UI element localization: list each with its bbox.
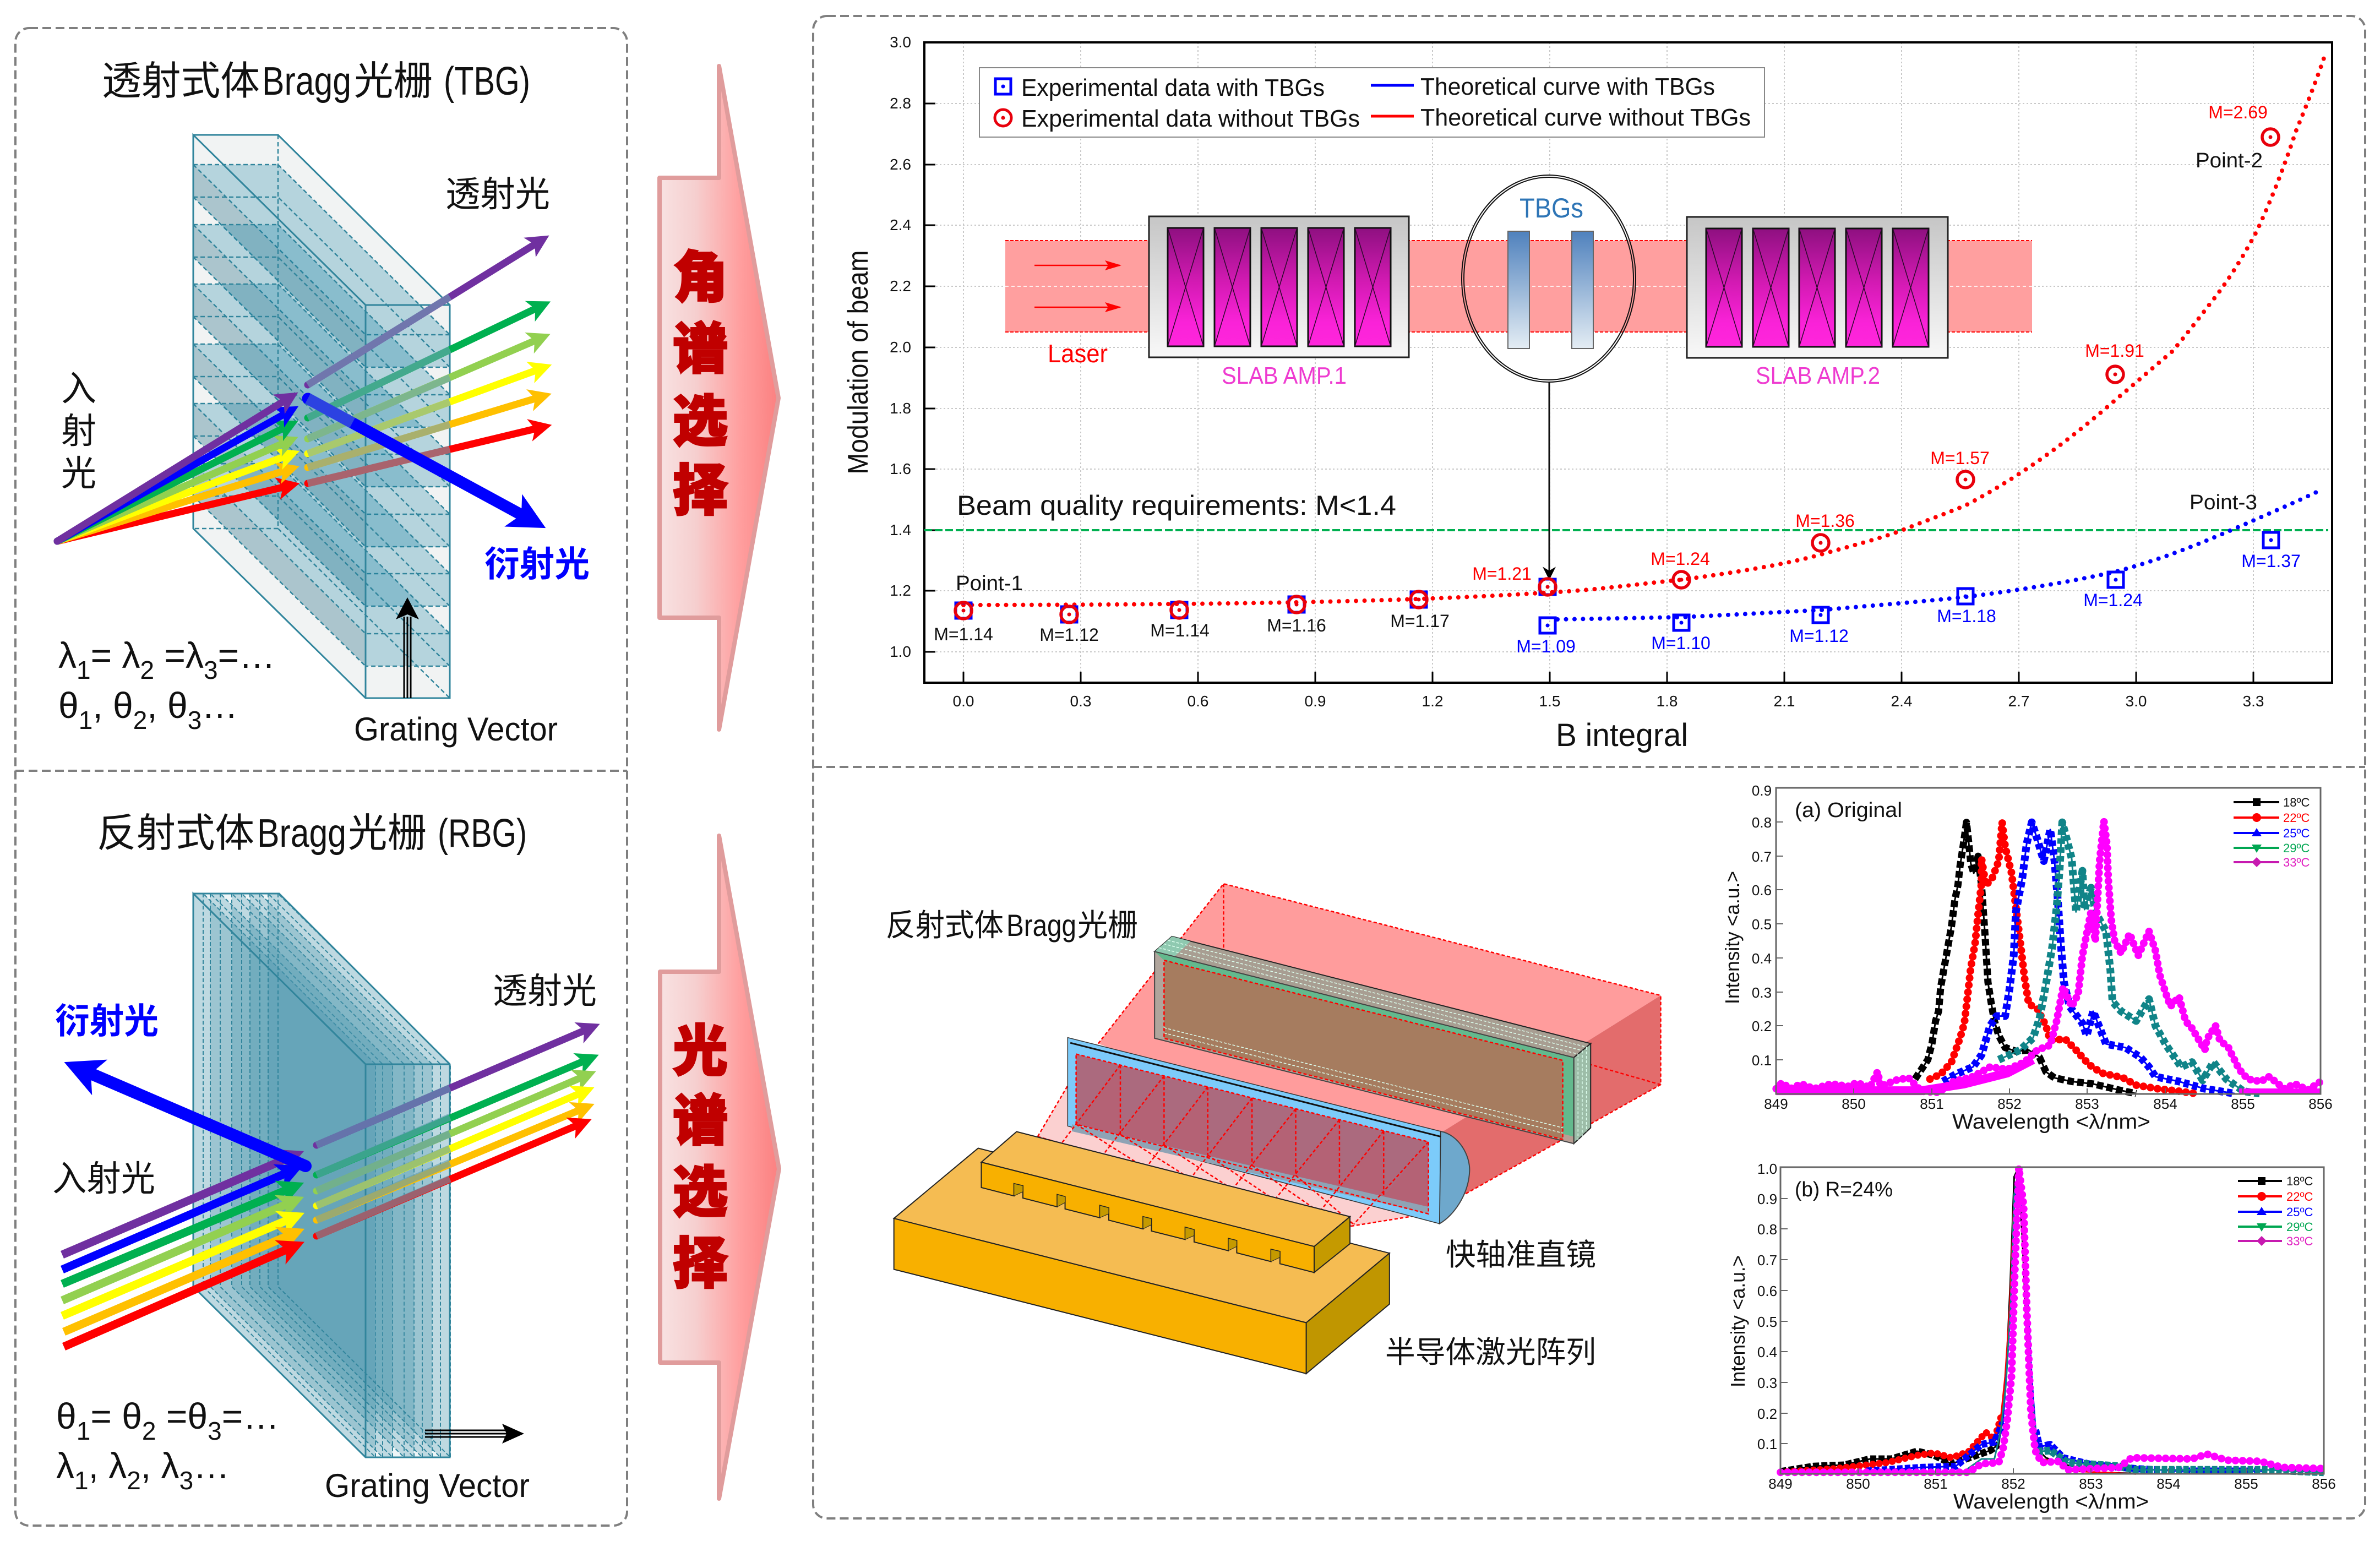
heading: RBG title: 反射式体: [97, 812, 254, 856]
x tick labels: [953, 693, 2264, 710]
y tick labels: 1.4: [890, 521, 911, 538]
series 18C: [1780, 1168, 2136, 1473]
label: 衍射光: 衍射光: [484, 544, 590, 584]
y tick labels: 2.6: [890, 156, 911, 173]
beam: laser band: [1005, 241, 2032, 332]
heading: TBG title: [102, 59, 530, 104]
y tick labels: 1.2: [890, 582, 911, 599]
panel: right dashed frame: [813, 16, 2365, 1518]
legend b: 33ºC: [2286, 1234, 2313, 1248]
threshold line: [924, 529, 2328, 531]
legend: Theoretical curve without TBGs: [1420, 104, 1751, 131]
heading: RBG title: Bragg: [257, 812, 346, 856]
curve: theory without TBGs: [963, 55, 2325, 605]
y tick labels: 3.0: [890, 34, 911, 51]
arrows: incident rays TBG: [57, 401, 284, 541]
text: angles: 2: [133, 706, 147, 734]
x ticks: 849: [1768, 1475, 1793, 1492]
arrows: incident rays RBG: [62, 1159, 286, 1347]
series 33C: [1780, 1168, 2324, 1472]
data labels red: M=1.91: [2085, 341, 2144, 361]
x tick labels: 1.5: [1539, 693, 1560, 710]
x ticks: 854: [2156, 1475, 2181, 1492]
y axis label: Intensity <a.u.>: [1727, 1255, 1749, 1387]
arrow: spectral selection: [660, 836, 779, 1499]
heading: RBG title: 光栅: [348, 812, 427, 856]
label: 衍射光 RBG: 衍射光: [55, 1001, 159, 1041]
x ticks: 855: [2231, 1096, 2255, 1112]
y ticks: 0.9: [1757, 1191, 1777, 1207]
data labels red: M=1.57: [1930, 448, 1990, 468]
arrow: angular selection: 选: [673, 391, 728, 453]
y ticks: 0.5: [1757, 1314, 1777, 1330]
x tick labels: 1.2: [1422, 693, 1443, 710]
diagram: reflection grating box: [193, 894, 450, 1457]
x ticks: [1764, 1096, 2333, 1112]
arrow: angular selection: [660, 66, 778, 729]
label: Grating Vector RBG: Grating Vector: [325, 1467, 530, 1504]
amplifier 1: [1149, 216, 1409, 357]
data labels black: M=1.17: [1390, 611, 1450, 631]
legend: Theoretical curve with TBGs: [1420, 73, 1715, 100]
legend a: 25ºC: [2283, 826, 2310, 840]
heading: TBG title: (TBG): [444, 59, 530, 104]
arrow: grating vector TBG: [396, 597, 419, 698]
series 29C: [1964, 1168, 2324, 1472]
text: wavelengths: , λ: [141, 1445, 179, 1486]
data labels blue: M=1.10: [1651, 633, 1711, 653]
y ticks: 0.4: [1752, 950, 1772, 967]
x ticks: 854: [2153, 1096, 2177, 1112]
label: 透射光: 透射光: [445, 175, 550, 214]
TBG elements and lens: [1462, 175, 1636, 382]
y ticks: 0.2: [1752, 1018, 1772, 1034]
label: 反射式体Bragg光栅: [886, 908, 1138, 943]
label: Point-3: Point-3: [2190, 491, 2257, 514]
label: 半导体激光阵列: 半导体激光阵列: [1385, 1335, 1596, 1369]
legend b: 22ºC: [2286, 1190, 2313, 1204]
y axis label: Intensity <a.u.>: [1721, 871, 1744, 1004]
text: wavelength equal: =…: [218, 635, 275, 676]
chart: (a) original spectra: [1721, 782, 2333, 1134]
label: SLAB AMP.1: SLAB AMP.1: [1222, 362, 1347, 389]
y ticks: 0.6: [1757, 1283, 1777, 1299]
emitter fan: [1038, 1086, 1428, 1226]
x tick labels: 0.0: [953, 693, 974, 710]
text: wavelength equal: = λ: [91, 635, 140, 676]
arrow: diffracted ray RBG: [91, 1074, 306, 1166]
label: 入射光 vertical: 光: [61, 454, 96, 493]
text: angles: , θ: [147, 685, 188, 726]
arrow: spectral selection: 择: [673, 1233, 728, 1295]
x ticks: 849: [1764, 1096, 1788, 1112]
ellipse: TBG lens background: [1462, 175, 1636, 382]
arrow: spectral selection: 选: [673, 1162, 728, 1223]
x ticks: [1768, 1475, 2336, 1492]
heading: TBG title: Bragg: [262, 59, 351, 104]
data labels black: M=1.16: [1267, 616, 1326, 635]
chart: beam modulation vs B integral: [842, 34, 2332, 753]
series 29C: [1998, 823, 2261, 1093]
text: angles: , θ: [92, 685, 133, 726]
text: wavelength equal: =λ: [154, 635, 204, 676]
x tick labels: 0.6: [1188, 693, 1208, 710]
x tick labels: 2.7: [2008, 693, 2029, 710]
arrow: spectral selection: 谱: [673, 1091, 728, 1152]
legend b: 18ºC: [2286, 1174, 2313, 1188]
data labels red: M=1.21: [1472, 564, 1532, 584]
label: 入射光 vertical: 入: [61, 369, 96, 409]
data labels red: [1472, 102, 2268, 584]
data labels blue: [1516, 551, 2301, 656]
text: wavelengths: λ: [56, 1445, 74, 1486]
text: angle equal: =θ: [156, 1396, 208, 1436]
data labels red: M=2.69: [2208, 102, 2268, 122]
y tick labels: 2.0: [890, 339, 911, 356]
y tick labels: 2.4: [890, 216, 911, 233]
text: angles: 3: [188, 706, 201, 734]
legend: Experimental data without TBGs: [1021, 105, 1360, 132]
arrow: angular selection: 角: [673, 247, 728, 309]
x ticks: 855: [2234, 1475, 2258, 1492]
y ticks: 0.6: [1752, 882, 1772, 899]
text: angles: …: [201, 685, 238, 726]
curve: theory with TBGs: [1557, 489, 2323, 619]
x axis label: Wavelength <λ/nm>: [1953, 1490, 2149, 1513]
text: angle equal: = θ: [90, 1396, 142, 1436]
x tick labels: 3.3: [2243, 693, 2264, 710]
text: angle equal: 3: [208, 1417, 222, 1445]
label: 入射光 vertical: [61, 369, 96, 493]
legend: [979, 68, 1764, 137]
text: wavelength equal: 2: [140, 656, 154, 684]
y ticks: 0.3: [1757, 1375, 1777, 1391]
x ticks: 851: [1924, 1475, 1948, 1492]
data labels blue: M=1.37: [2241, 551, 2301, 571]
x ticks: 852: [2001, 1475, 2025, 1492]
label: 反射式体Bragg光栅: 反射式体: [886, 908, 1004, 943]
axis title: y: Modulation of beam: [842, 250, 874, 475]
data labels blue: M=1.09: [1516, 636, 1576, 656]
y ticks: 0.7: [1752, 848, 1772, 865]
series 18C: [1915, 823, 2136, 1093]
y ticks: 0.8: [1752, 814, 1772, 831]
data labels black: M=1.14: [1150, 620, 1210, 640]
diagram: laser diode stack with optics: [894, 884, 1660, 1374]
series 25C: [1866, 1168, 2265, 1471]
legend b: 29ºC: [2286, 1220, 2313, 1234]
grating in beam: [1154, 936, 1591, 1144]
y tick labels: [890, 34, 911, 660]
data labels red: M=1.36: [1795, 511, 1855, 531]
x tick labels: 3.0: [2126, 693, 2147, 710]
legend: Experimental data with TBGs: [1021, 74, 1325, 101]
heading: RBG title: [97, 812, 527, 856]
arrow: diffracted ray TBG: [308, 399, 521, 515]
y ticks: 1.0: [1757, 1161, 1777, 1177]
legend a: 22ºC: [2283, 811, 2310, 825]
text: angles: 1: [79, 706, 92, 734]
text: wavelengths: 3: [179, 1466, 193, 1495]
y ticks: [1752, 782, 1772, 1069]
arrow: TBG to data point: [1548, 382, 1550, 579]
label: TBGs: TBGs: [1520, 193, 1583, 224]
x ticks: 853: [2079, 1475, 2103, 1492]
label: 透射光 RBG: 透射光: [493, 971, 597, 1011]
y ticks: 0.4: [1757, 1344, 1777, 1360]
legend a: 33ºC: [2283, 856, 2310, 869]
heading: TBG title: 透射式体: [102, 59, 260, 104]
x axis label: Wavelength <λ/nm>: [1952, 1110, 2150, 1134]
text: angle equal: θ: [56, 1396, 77, 1436]
y tick labels: 1.6: [890, 460, 911, 477]
data: without TBGs markers: [955, 129, 2279, 623]
y ticks: 0.8: [1757, 1221, 1777, 1238]
data labels black: M=1.12: [1039, 625, 1099, 645]
text: angle equal: 2: [142, 1417, 156, 1445]
y ticks: 0.1: [1757, 1436, 1777, 1452]
arrows: transmitted rays RBG: [317, 1031, 584, 1236]
data labels black: [934, 611, 1450, 645]
y tick labels: 1.0: [890, 643, 911, 660]
series 22C: [1930, 823, 2196, 1093]
panel label: (a) Original: [1795, 799, 1902, 822]
legend a: 18ºC: [2283, 796, 2310, 809]
amplifier 2: [1687, 217, 1948, 358]
chart: (b) R=24% spectra: [1727, 1161, 2336, 1513]
label: Point-2: Point-2: [2196, 149, 2263, 172]
beam: expanding red light: [1098, 884, 1660, 1195]
legend b: 25ºC: [2286, 1205, 2313, 1219]
heading: RBG title: (RBG): [438, 812, 527, 856]
x ticks: 856: [2308, 1096, 2333, 1112]
y ticks: 0.9: [1752, 782, 1772, 799]
heading: TBG title: 光栅: [354, 59, 433, 104]
y tick labels: 2.8: [890, 95, 911, 112]
label: 入射光 RBG: 入射光: [52, 1159, 155, 1199]
data labels red: M=1.24: [1651, 549, 1710, 569]
x tick labels: 1.8: [1657, 693, 1678, 710]
label: Point-1: Point-1: [956, 572, 1023, 595]
y tick labels: 1.8: [890, 400, 911, 417]
text: angle equal: 1: [77, 1417, 90, 1445]
text: wavelength equal: λ: [58, 635, 77, 676]
x ticks: 850: [1842, 1096, 1866, 1112]
y ticks: 0.3: [1752, 984, 1772, 1001]
label: Laser: Laser: [1048, 339, 1108, 368]
text: wavelengths: …: [193, 1445, 230, 1486]
x tick labels: 0.3: [1070, 693, 1091, 710]
text: wavelengths: 2: [127, 1466, 141, 1495]
arrow: spectral selection: 光: [673, 1021, 728, 1082]
data labels blue: M=1.12: [1789, 626, 1849, 646]
data labels black: M=1.14: [934, 624, 993, 644]
x ticks: 851: [1920, 1096, 1944, 1112]
y ticks: 0.5: [1752, 916, 1772, 933]
label: 反射式体Bragg光栅: 光栅: [1077, 908, 1138, 943]
threshold label: Beam quality requirements: M<1.4: [957, 490, 1396, 521]
arrow: grating vector RBG: [425, 1424, 524, 1444]
x ticks: 856: [2312, 1475, 2336, 1492]
data labels blue: M=1.24: [2083, 590, 2143, 610]
text: angles: θ: [58, 685, 79, 726]
label: 反射式体Bragg光栅: Bragg: [1006, 908, 1076, 943]
text: wavelength equal: 3: [204, 656, 218, 684]
upper block with notches: [981, 1132, 1350, 1272]
y ticks: 0.1: [1752, 1052, 1772, 1069]
base block: laser array: [894, 1148, 1390, 1374]
panel: left dashed frame: [15, 28, 627, 1526]
diagram: transmission grating box: [193, 135, 450, 698]
x ticks: 853: [2075, 1096, 2099, 1112]
text: angle equal: =…: [222, 1396, 279, 1436]
axis title: x: B integral: [1556, 717, 1688, 753]
y tick labels: 2.2: [890, 277, 911, 295]
text: wavelength equal: 1: [77, 656, 91, 684]
x ticks: 850: [1846, 1475, 1870, 1492]
data: with TBGs markers: [956, 532, 2279, 633]
legend b: [2238, 1174, 2313, 1248]
label: Grating Vector TBG: Grating Vector: [354, 711, 558, 748]
label: SLAB AMP.2: SLAB AMP.2: [1756, 362, 1880, 389]
y ticks: 0.2: [1757, 1406, 1777, 1422]
arrow: angular selection: 谱: [673, 319, 728, 380]
label: 快轴准直镜: 快轴准直镜: [1446, 1238, 1596, 1272]
panel label: (b) R=24%: [1795, 1178, 1893, 1201]
y ticks: [1757, 1161, 1777, 1452]
arrows: transmitted rays TBG: [308, 244, 536, 483]
lens: fast-axis collimator: [1061, 1038, 1469, 1224]
arrow: angular selection: 择: [673, 460, 728, 522]
y ticks: 0.7: [1757, 1252, 1777, 1268]
legend a: 29ºC: [2283, 841, 2310, 855]
text: wavelengths: 1: [74, 1466, 89, 1495]
x tick labels: 2.4: [1891, 693, 1912, 710]
series 33C: [1776, 821, 2321, 1092]
text: wavelengths: , λ: [89, 1445, 127, 1486]
series 22C: [1780, 1168, 2136, 1474]
legend a: [2234, 796, 2310, 869]
x tick labels: 0.9: [1305, 693, 1326, 710]
label: 入射光 vertical: 射: [61, 411, 96, 451]
series 25C: [1943, 823, 2235, 1093]
x tick labels: 2.1: [1774, 693, 1795, 710]
data labels blue: M=1.18: [1937, 606, 1996, 626]
x ticks: 852: [1997, 1096, 2022, 1112]
